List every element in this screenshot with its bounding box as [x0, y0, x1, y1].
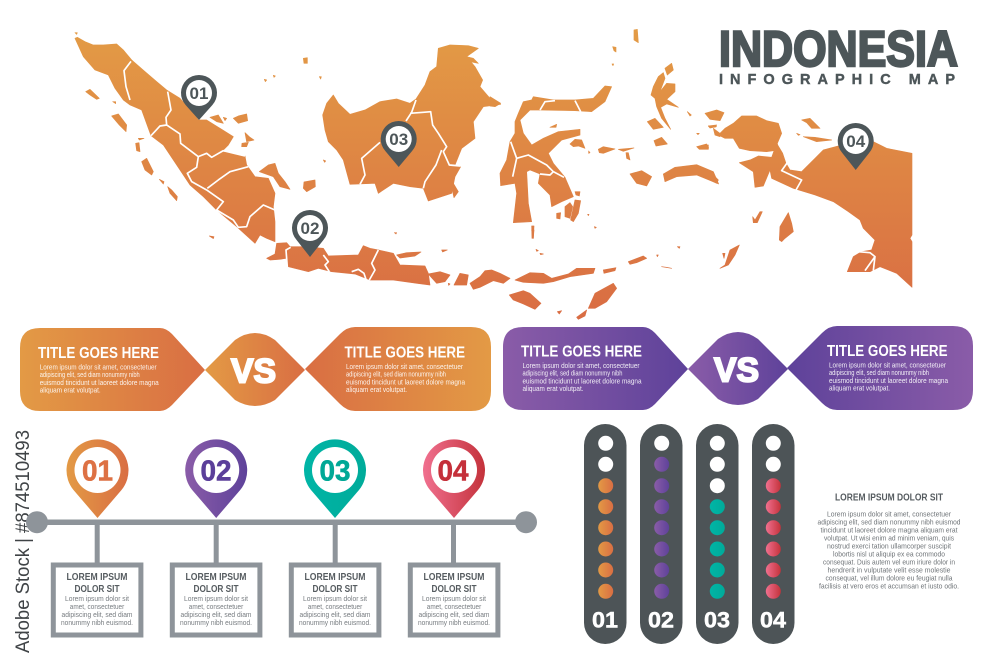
panel: timeline — [26, 439, 537, 635]
map pin 04: 04 — [846, 132, 866, 151]
purple left text — [521, 344, 642, 393]
Borneo offshore islands — [303, 57, 478, 198]
timeline step 02: nonummy nibh euismod. — [180, 618, 252, 627]
text block: lorem ipsum: volutpat. Ut wisi enim ad minim veniam, quis — [824, 534, 954, 543]
purple right text — [827, 343, 949, 393]
orange left text: euismod tincidunt ut laoreet dolore magna — [40, 378, 159, 387]
Java province borders — [286, 247, 378, 280]
purple left block — [503, 327, 688, 410]
text block: lorem ipsum: LOREM IPSUM DOLOR SIT — [835, 492, 943, 503]
capsule 03: 03 — [704, 608, 730, 632]
purple right text: adipiscing elit, sed diam nonummy nibh — [829, 368, 929, 377]
purple left text: aliquam erat volutpat. — [522, 384, 584, 393]
timeline step 01: nonummy nibh euismod. — [61, 618, 133, 627]
purple right text: Lorem ipsum dolor sit amet, consectetuer — [829, 360, 946, 370]
panel: purple comparison — [503, 326, 973, 410]
map pin 04 — [838, 123, 874, 170]
Java — [267, 243, 430, 285]
timeline step 03: LOREM IPSUM — [304, 572, 366, 583]
text block: lorem ipsum: tincidunt ut laoreet dolore magna aliquam erat — [820, 526, 958, 535]
text block: lorem ipsum: nostrud exerci tation ullamcorper suscipit — [827, 542, 951, 550]
map pin 03: 03 — [389, 130, 408, 149]
timeline step 04: LOREM IPSUM — [424, 572, 484, 583]
capsule 02 — [640, 424, 682, 644]
orange right text: adipiscing elit, sed diam nonummy nibh — [346, 370, 446, 379]
map: Java region — [267, 233, 468, 285]
Sumatra — [75, 37, 275, 243]
map: Borneo region — [303, 45, 501, 201]
purple right text: euismod tincidunt ut laoreet dolore magna — [829, 376, 949, 385]
text block: lorem ipsum — [818, 492, 960, 590]
map: Lesser Sunda islands — [470, 230, 680, 319]
orange VS badge — [205, 333, 305, 406]
timeline step 03: 03 — [320, 456, 350, 488]
orange right block — [305, 327, 491, 411]
Papua Bird's Head — [718, 116, 782, 152]
timeline step 01: LOREM IPSUM — [66, 572, 128, 583]
Halmahera and Morotai — [612, 29, 678, 129]
text block: lorem ipsum: consequat, vel illum dolore eu feugiat nulla — [826, 573, 953, 582]
Riau islands — [210, 75, 275, 147]
text block: lorem ipsum: facilisis at vero eros et accumsan et iusto odio. — [819, 581, 959, 590]
map pin 03 — [381, 121, 417, 167]
timeline step 04: adipiscing elit, sed diam — [418, 610, 490, 619]
timeline step 01: DOLOR SIT — [74, 584, 120, 595]
timeline step 03: DOLOR SIT — [312, 584, 358, 595]
purple VS label: VS — [714, 352, 759, 390]
orange right text: euismod tincidunt ut laoreet dolore magna — [346, 378, 466, 386]
capsule 02: 02 — [648, 608, 674, 632]
orange right text: aliquam erat volutpat. — [346, 385, 407, 394]
Sulawesi offshore islands — [490, 97, 634, 238]
map: Maluku islands — [612, 29, 719, 186]
orange right text: TITLE GOES HERE — [344, 344, 465, 362]
timeline step 03 — [291, 439, 379, 635]
purple right text: aliquam erat volutpat. — [829, 384, 890, 393]
timeline step 04: 04 — [438, 456, 468, 488]
purple VS badge — [688, 332, 788, 405]
timeline step 04: DOLOR SIT — [432, 584, 476, 595]
timeline step 02: adipiscing elit, sed diam — [180, 610, 252, 619]
timeline step 01: Lorem ipsum dolor sit — [65, 594, 129, 603]
title: INFOGRAPHIC MAP — [719, 72, 955, 88]
timeline step 01: 01 — [82, 456, 113, 488]
panel: orange comparison — [20, 327, 491, 411]
map pin 02: 02 — [301, 219, 319, 238]
capsule 01: 01 — [592, 608, 618, 632]
Papua mainland — [739, 142, 912, 287]
map pin 01 — [181, 75, 217, 120]
timeline step 01: amet, consectetuer — [70, 602, 125, 611]
timeline step 03: nonummy nibh euismod. — [299, 618, 371, 627]
map pin 01: 01 — [190, 84, 208, 103]
timeline step 02: DOLOR SIT — [194, 584, 238, 595]
purple left text: Lorem ipsum dolor sit amet, consectetuer — [522, 361, 640, 370]
Flores chain — [515, 268, 616, 283]
timeline step 02: Lorem ipsum dolor sit — [184, 594, 248, 603]
timeline step 03: Lorem ipsum dolor sit — [303, 594, 367, 603]
capsule 04 — [752, 424, 794, 644]
Sumbawa — [470, 270, 510, 289]
map: Sumatra region — [75, 33, 290, 243]
orange left text: adipiscing elit, sed diam nonummy nibh — [40, 370, 140, 379]
timeline step 02: LOREM IPSUM — [186, 572, 246, 583]
text block: lorem ipsum: lobortis nisl ut aliquip ex ea commodo — [833, 550, 945, 558]
orange left text: TITLE GOES HERE — [38, 345, 159, 362]
Papua offshore islands — [700, 110, 832, 268]
timeline step 04: amet, consectetuer — [427, 602, 482, 611]
timeline step 01: adipiscing elit, sed diam — [62, 610, 132, 619]
timeline step 01 — [53, 439, 141, 635]
purple right text: TITLE GOES HERE — [827, 343, 948, 360]
Borneo — [323, 45, 501, 201]
map: Sulawesi region — [490, 86, 634, 238]
orange left text: Lorem ipsum dolor sit amet, consectetuer — [40, 362, 157, 372]
Borneo province borders — [360, 100, 461, 188]
orange right text: Lorem ipsum dolor sit amet, consectetuer — [346, 362, 463, 371]
orange VS label: VS — [231, 352, 276, 390]
purple left text: adipiscing elit, sed diam nonummy nibh — [522, 369, 622, 378]
orange left text — [38, 345, 159, 395]
orange left text: aliquam erat volutpat. — [40, 386, 101, 395]
timeline step 02: amet, consectetuer — [189, 602, 244, 611]
orange left block — [20, 328, 205, 411]
timeline step 04: Lorem ipsum dolor sit — [422, 594, 486, 603]
timeline step 04 — [410, 439, 498, 635]
title: INDONESIA — [719, 21, 958, 77]
capsule 03 — [696, 424, 738, 644]
purple left text: euismod tincidunt ut laoreet dolore magna — [522, 376, 642, 386]
orange right text — [344, 344, 466, 394]
timeline axis — [26, 511, 537, 533]
timeline step 02 — [172, 439, 260, 635]
text block: lorem ipsum: Lorem ipsum dolor sit amet, consectetuer — [827, 510, 951, 519]
Obi, Buru and Seram — [630, 112, 719, 186]
timeline step 02: 02 — [200, 456, 232, 488]
text block: lorem ipsum: consequat. Duis autem vel eum iriure dolor in — [823, 557, 955, 566]
Madura, Bali and Lombok — [394, 233, 468, 285]
Bangka island — [259, 163, 290, 189]
Sulawesi — [500, 86, 612, 223]
timeline step 03: adipiscing elit, sed diam — [300, 610, 370, 619]
Alor and small islands — [532, 230, 680, 314]
stock credit: Adobe Stock | #874510493 — [13, 430, 34, 653]
Sumatra province borders — [124, 61, 275, 227]
map of Indonesia — [75, 29, 912, 319]
Sumatra offshore islands — [75, 33, 214, 239]
Papua borders — [782, 163, 875, 271]
text block: lorem ipsum: hendrerit in vulputate velit esse molestie — [828, 565, 950, 574]
timeline step 03: amet, consectetuer — [308, 602, 363, 611]
capsule 01 — [584, 424, 626, 644]
Timor and Rote — [577, 283, 617, 319]
Sulawesi province borders — [511, 101, 581, 177]
purple right block — [787, 326, 973, 410]
panel: dot capsule chart — [584, 424, 794, 644]
capsule 04: 04 — [760, 608, 787, 632]
purple left text: TITLE GOES HERE — [521, 344, 642, 360]
map pin 02 — [292, 210, 328, 257]
map: Papua region — [700, 110, 912, 287]
text block: lorem ipsum: adipiscing elit, sed diam nonummy nibh euismod — [818, 518, 960, 527]
Sumba — [509, 291, 541, 309]
timeline step 04: nonummy nibh euismod. — [418, 618, 490, 627]
